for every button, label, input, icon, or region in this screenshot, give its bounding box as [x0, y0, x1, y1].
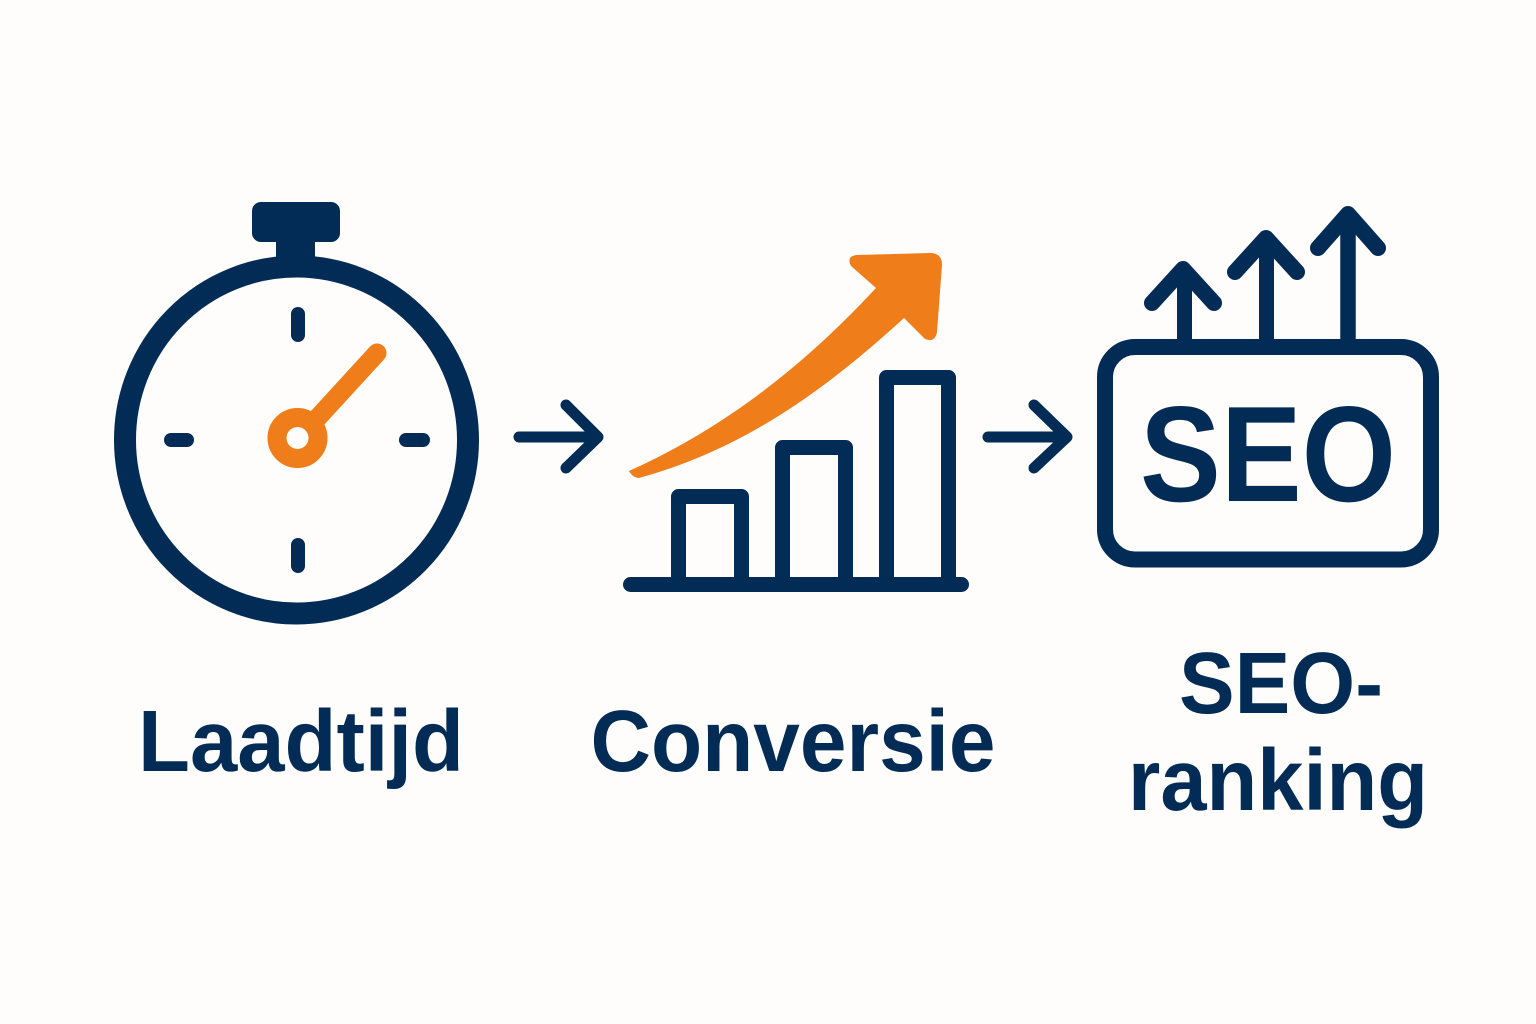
icon: stopwatch	[125, 202, 468, 614]
SEO board text: SEO	[1140, 378, 1396, 530]
label: Conversie: Conversie	[590, 693, 996, 790]
label: SEO-ranking: ranking	[1128, 732, 1428, 829]
arrow: laadtijd to conversie	[519, 405, 598, 468]
label: Laadtijd: Laadtijd	[138, 693, 464, 790]
label: SEO-ranking	[1128, 635, 1428, 829]
growth arrow	[629, 253, 942, 478]
icon: growth bar chart	[629, 253, 962, 584]
label: SEO-ranking: SEO-	[1179, 635, 1383, 732]
arrow: conversie to SEO	[988, 405, 1067, 468]
icon: SEO board with rising arrows	[1105, 214, 1431, 560]
